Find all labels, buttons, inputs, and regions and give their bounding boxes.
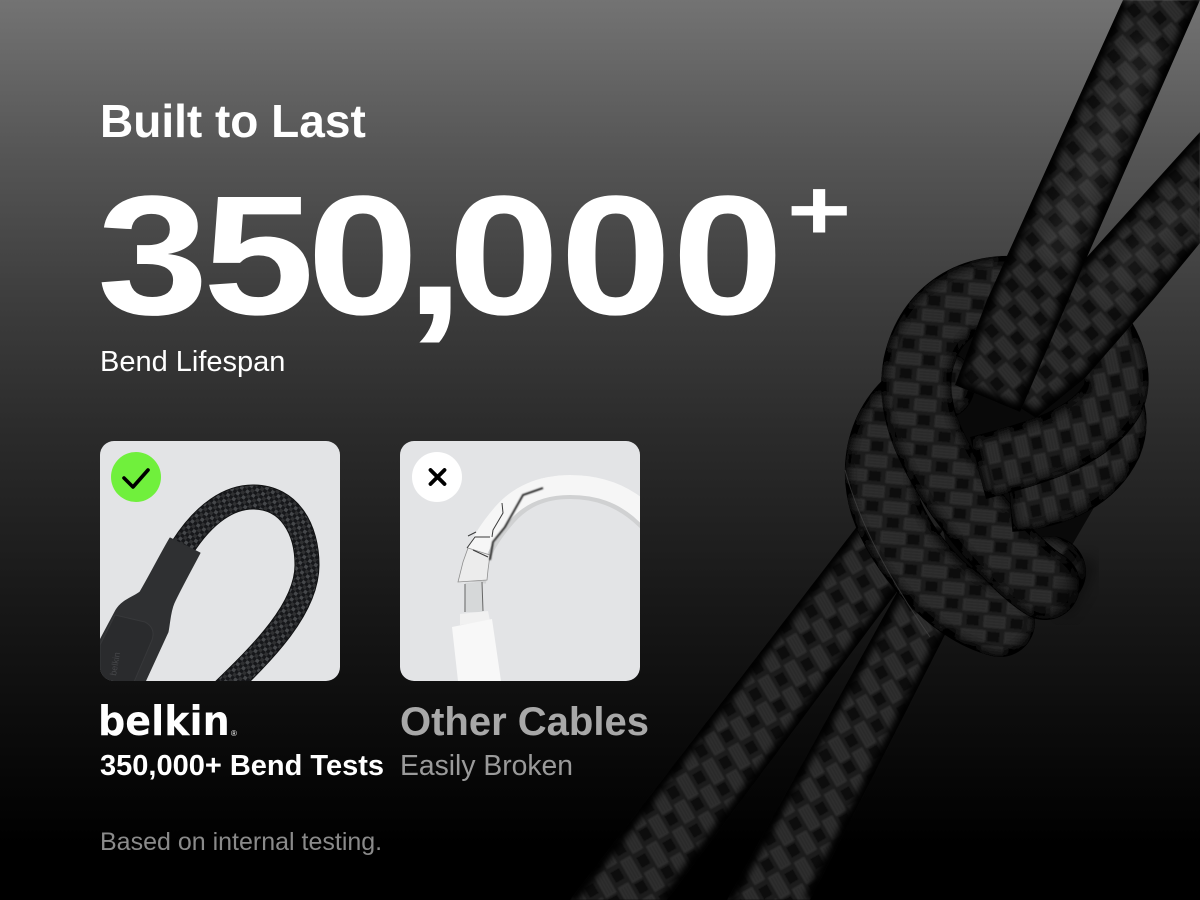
braided cable photo: [98, 497, 307, 692]
knot core shadow: [920, 330, 1110, 600]
registered mark: ®: [231, 729, 237, 738]
belkin caption: 350,000+ Bend Tests: [100, 750, 384, 782]
panel: belkin cable: [98, 441, 340, 692]
logo wordmark: belkin: [98, 698, 230, 745]
title: Built to Last: [100, 95, 366, 147]
knotted braided cable: [570, 0, 1200, 900]
braided cable photo: belkin: [108, 651, 122, 676]
other cables heading: Other Cables: [400, 700, 649, 744]
other cables caption: Easily Broken: [400, 749, 573, 781]
belkin logo: [98, 698, 237, 745]
footnote: Based on internal testing.: [100, 828, 382, 856]
right upper knot band: [978, 325, 1117, 468]
panel: other cables: [400, 441, 660, 681]
rim highlight: [845, 470, 930, 637]
number value: ,: [405, 148, 465, 353]
central knot strand: [916, 291, 1045, 585]
plus superscript: +: [787, 162, 851, 257]
top cable strand: [955, 0, 1200, 412]
damaged cable photo: [452, 485, 660, 681]
outer left knot strand: [880, 385, 1000, 622]
big number: [97, 148, 851, 353]
number value: 350: [97, 161, 419, 351]
icon: cross: [412, 452, 462, 502]
knot shading: [1050, 40, 1190, 610]
right cable strand: [1025, 132, 1200, 409]
number value: 000: [448, 161, 784, 351]
subtitle: Bend Lifespan: [100, 346, 285, 378]
small tail bulge of knot: [1005, 572, 1050, 582]
lower left cable strand: [570, 490, 943, 900]
right lower knot band: [1010, 400, 1116, 502]
icon: green check: [111, 452, 161, 502]
lower right cable strand: [728, 592, 944, 900]
